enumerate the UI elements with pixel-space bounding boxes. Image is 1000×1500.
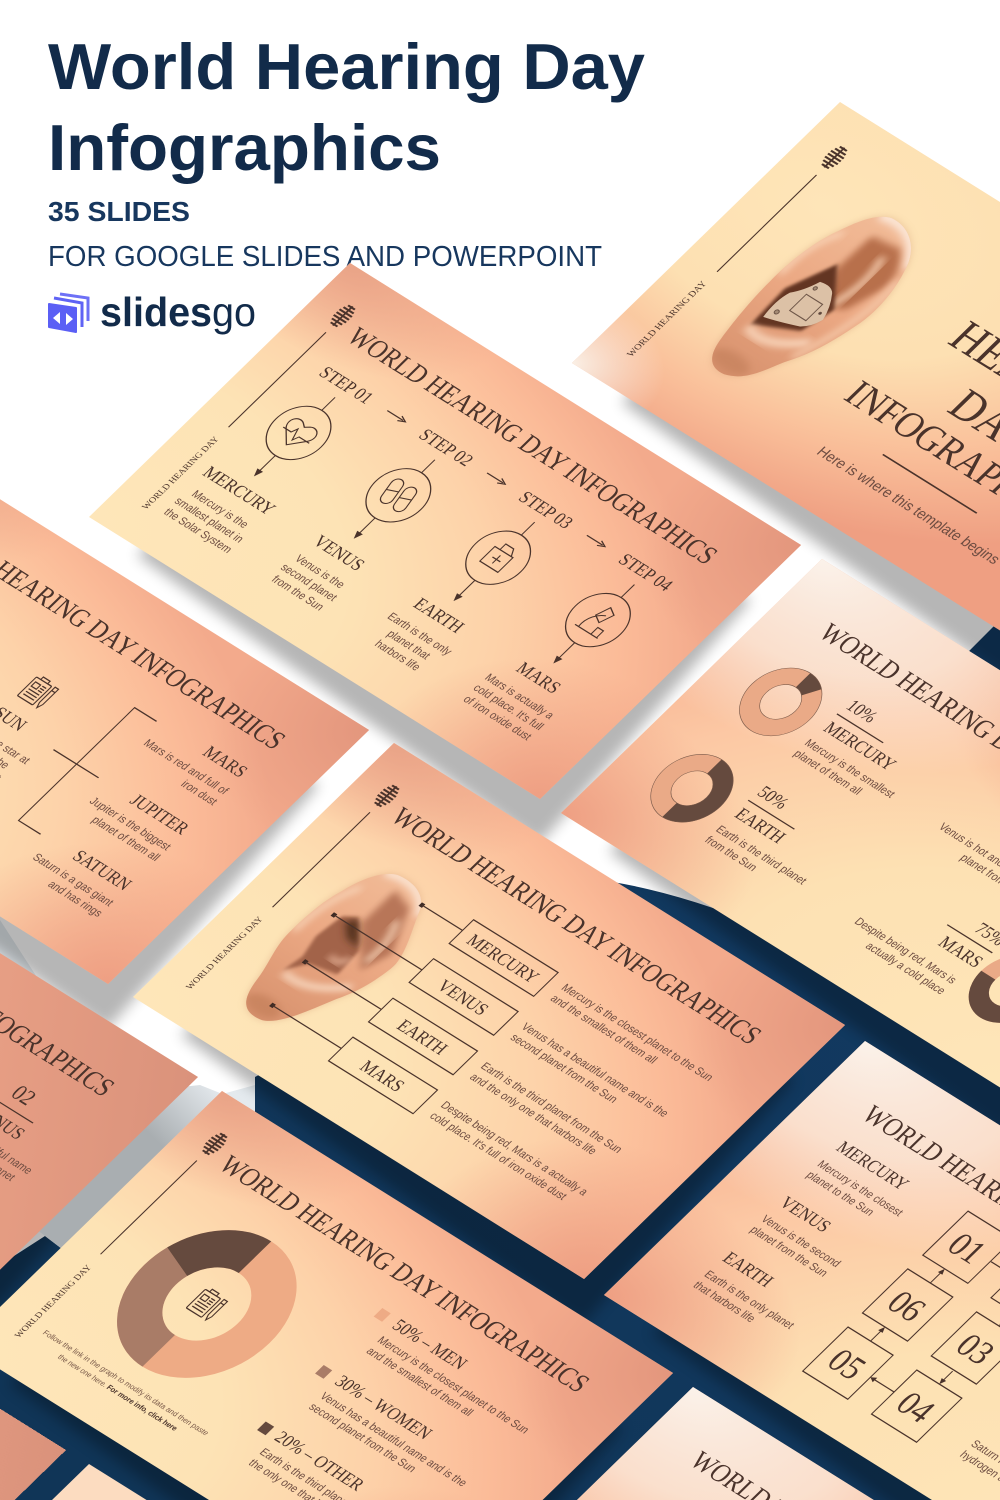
callout: mars: cold place. It's full of iron oxide dust [427,1110,569,1203]
step 1 [160,357,388,556]
slide: percentages: EARTH [731,804,791,847]
slide: planets bracket: and has rings [45,879,105,920]
callout: earth [291,950,627,1168]
arrow [585,533,607,549]
title [48,30,645,184]
step 3: EARTH [409,594,469,637]
slide: percentages [561,559,1000,1095]
slide: numbered flow: EARTH [718,1248,778,1291]
callout: mercury [407,893,718,1096]
slide: numbered flow: Mercury is the closest [814,1159,905,1219]
slide: donut chart: WORLD HEARING DAY [13,1263,94,1340]
slide: bottom right [432,1387,1000,1500]
numbered boxes: 01 [939,1227,994,1271]
slide: numbered flow: VENUS [775,1192,836,1236]
legend: other [230,1417,423,1500]
step 2: second planet [277,562,339,604]
slide: numbered flow: that harbors life [690,1279,758,1325]
slide: numbered flow: planet to the Sun [803,1169,877,1219]
title: Infographics [48,111,441,184]
step 3: Earth is the only [384,611,455,658]
numbered boxes: 06 [879,1284,933,1329]
hearing aid detail [773,280,836,331]
arrow [485,471,507,486]
step 4: cold place. It's full [470,682,546,733]
step 2: STEP 02 [414,425,478,470]
legend: women: second planet from the Sun [306,1401,419,1475]
numbered boxes [803,1211,1000,1442]
step 4 [459,544,688,744]
subtitle: platforms: FOR GOOGLE SLIDES AND POWERPOINT [48,241,602,273]
slide: percentages: 50% [753,782,794,813]
heading: WORLD HEARING DAY INFOGRAPHICS [341,321,725,570]
title: World Hearing Day [48,30,645,103]
step 3 [362,484,585,680]
slide: planets bracket: Saturn is a gas giant [29,852,116,909]
callout: earth: and the only one that harbors life [467,1071,599,1157]
slide: planets bracket: iron dust [178,778,220,808]
slide: percentages: MERCURY [819,718,901,774]
step 1: Mercury is the [188,488,251,531]
step 3: harbors life [372,638,423,674]
callout: earth: Earth is the third planet from the Sun [478,1061,625,1156]
callout: mercury: Mercury is the closest planet to the Sun [558,982,716,1084]
numbered boxes: 04 [888,1386,943,1430]
step 1: the Solar System [161,506,235,556]
slide: ear diagram: WORLD HEARING DAY INFOGRAPHICS [385,801,769,1050]
slide: percentages: MARS [934,932,988,971]
slide: percentages: planet of them all [791,748,864,797]
step 1: smallest planet in [171,495,246,545]
step 4: Mars is actually a [482,672,557,722]
slide: donut chart: WORLD HEARING DAY INFOGRAPHICS [213,1149,597,1398]
light backdrop patch [0,920,255,1112]
callout: venus: Venus has a beautiful name and is the [518,1021,671,1120]
chart note: Follow the link in the graph to modify its data and then paste [41,1328,211,1437]
legend: other: 20% – OTHER [270,1427,369,1495]
step 2 [266,424,481,615]
slide: percentages: Mercury is the smallest [802,737,897,800]
subtitle: slide count: 35 SLIDES [48,196,190,227]
donut: 75% [966,954,1000,1024]
legend: men: 50% – MEN [388,1315,472,1373]
step 4: of iron oxide dust [460,694,534,743]
callout: earth: EARTH [393,1016,453,1059]
icon: document [186,1287,229,1321]
slide: four steps [89,263,801,799]
slide: planets bracket: Jupiter is the biggest [86,795,173,853]
callout: venus: VENUS [433,976,493,1019]
slide: ear diagram [133,743,845,1279]
legend: women [288,1360,489,1500]
slide: percentages: from the Sun [702,834,760,874]
donut: 10% [722,655,839,749]
callout: mercury: MERCURY [462,930,544,987]
slide: numbered flow: Venus is the second [758,1213,843,1270]
callout: mercury: and the smallest of them all [547,993,659,1066]
slide: percentages: Earth is the third planet [713,824,809,887]
step 2: Venus is the [292,553,347,591]
slide: percentages: 10% [842,696,882,726]
logo: slidesgo: slidesgo [100,289,256,335]
legend: men: and the smallest of them all [363,1345,475,1419]
slide: planets bracket: MARS [198,742,252,781]
slide: numbered flow [604,1041,1000,1500]
slide: planets bracket: planet of them all [89,814,162,864]
slide: numbered flow: Earth is the only planet [701,1269,796,1332]
slide: numbered flow: planet from the Sun [747,1224,830,1279]
ear [244,872,423,1022]
slide: four steps: WORLD HEARING DAY [140,435,222,511]
slide: donut chart [0,1091,673,1500]
callout: venus [320,903,673,1132]
slide: numbered flow: MERCURY [832,1137,914,1194]
legend: women: 30% – WOMEN [331,1371,437,1443]
legend: men: Mercury is the closest planet to the Sun [374,1335,532,1436]
flow arrows [843,1243,1000,1410]
step 4: MARS [512,658,566,697]
gray gap between slides [0,1085,225,1255]
step 1: MERCURY [199,462,280,519]
ear with hearing aid [711,215,914,378]
slide: partial left: 02 [6,1080,42,1110]
slide: cover: WORLD HEARING DAY [625,280,709,359]
navy background [0,620,1000,1500]
callout: mars: Despite being red, Mars is a actually a [438,1100,591,1199]
slide: bottom left light [0,1464,540,1500]
bracket connector [0,693,157,834]
callout: mars [258,993,593,1211]
donut chart [87,1208,326,1400]
slide: cover: Here is where this template begins [813,444,1000,568]
slide: planets bracket: Mars is red and full of [141,738,231,798]
slide: planets bracket: SATURN [68,846,137,894]
slide: planets bracket: JUPITER [126,790,194,838]
step 4: STEP 04 [614,550,678,595]
slide: ear diagram: WORLD HEARING DAY [184,915,266,991]
step 1: STEP 01 [315,362,378,408]
donut: 50% [634,741,750,835]
arrow [385,408,408,424]
legend: women: Venus has a beautiful name and is the [317,1391,469,1489]
step 3: planet that [384,628,433,662]
chart note: the new one here. For more info, click here [56,1352,180,1433]
step 2: VENUS [309,531,370,575]
numbered boxes: 05 [819,1343,874,1387]
legend: men [346,1304,552,1447]
slide: partial left [0,795,198,1331]
step 3: STEP 03 [514,487,578,532]
slide: percentages: Despite being red, Mars is [851,916,959,987]
icon: document [17,674,60,709]
slide: bottom left edge [0,1168,66,1500]
slide: percentages: actually a cold place [862,940,948,997]
callout: venus: second planet from the Sun [507,1032,620,1106]
step 2: from the Sun [269,574,326,613]
callout: mars: MARS [355,1056,409,1096]
slide: planets bracket [0,448,369,984]
slide: cover [572,102,1000,653]
